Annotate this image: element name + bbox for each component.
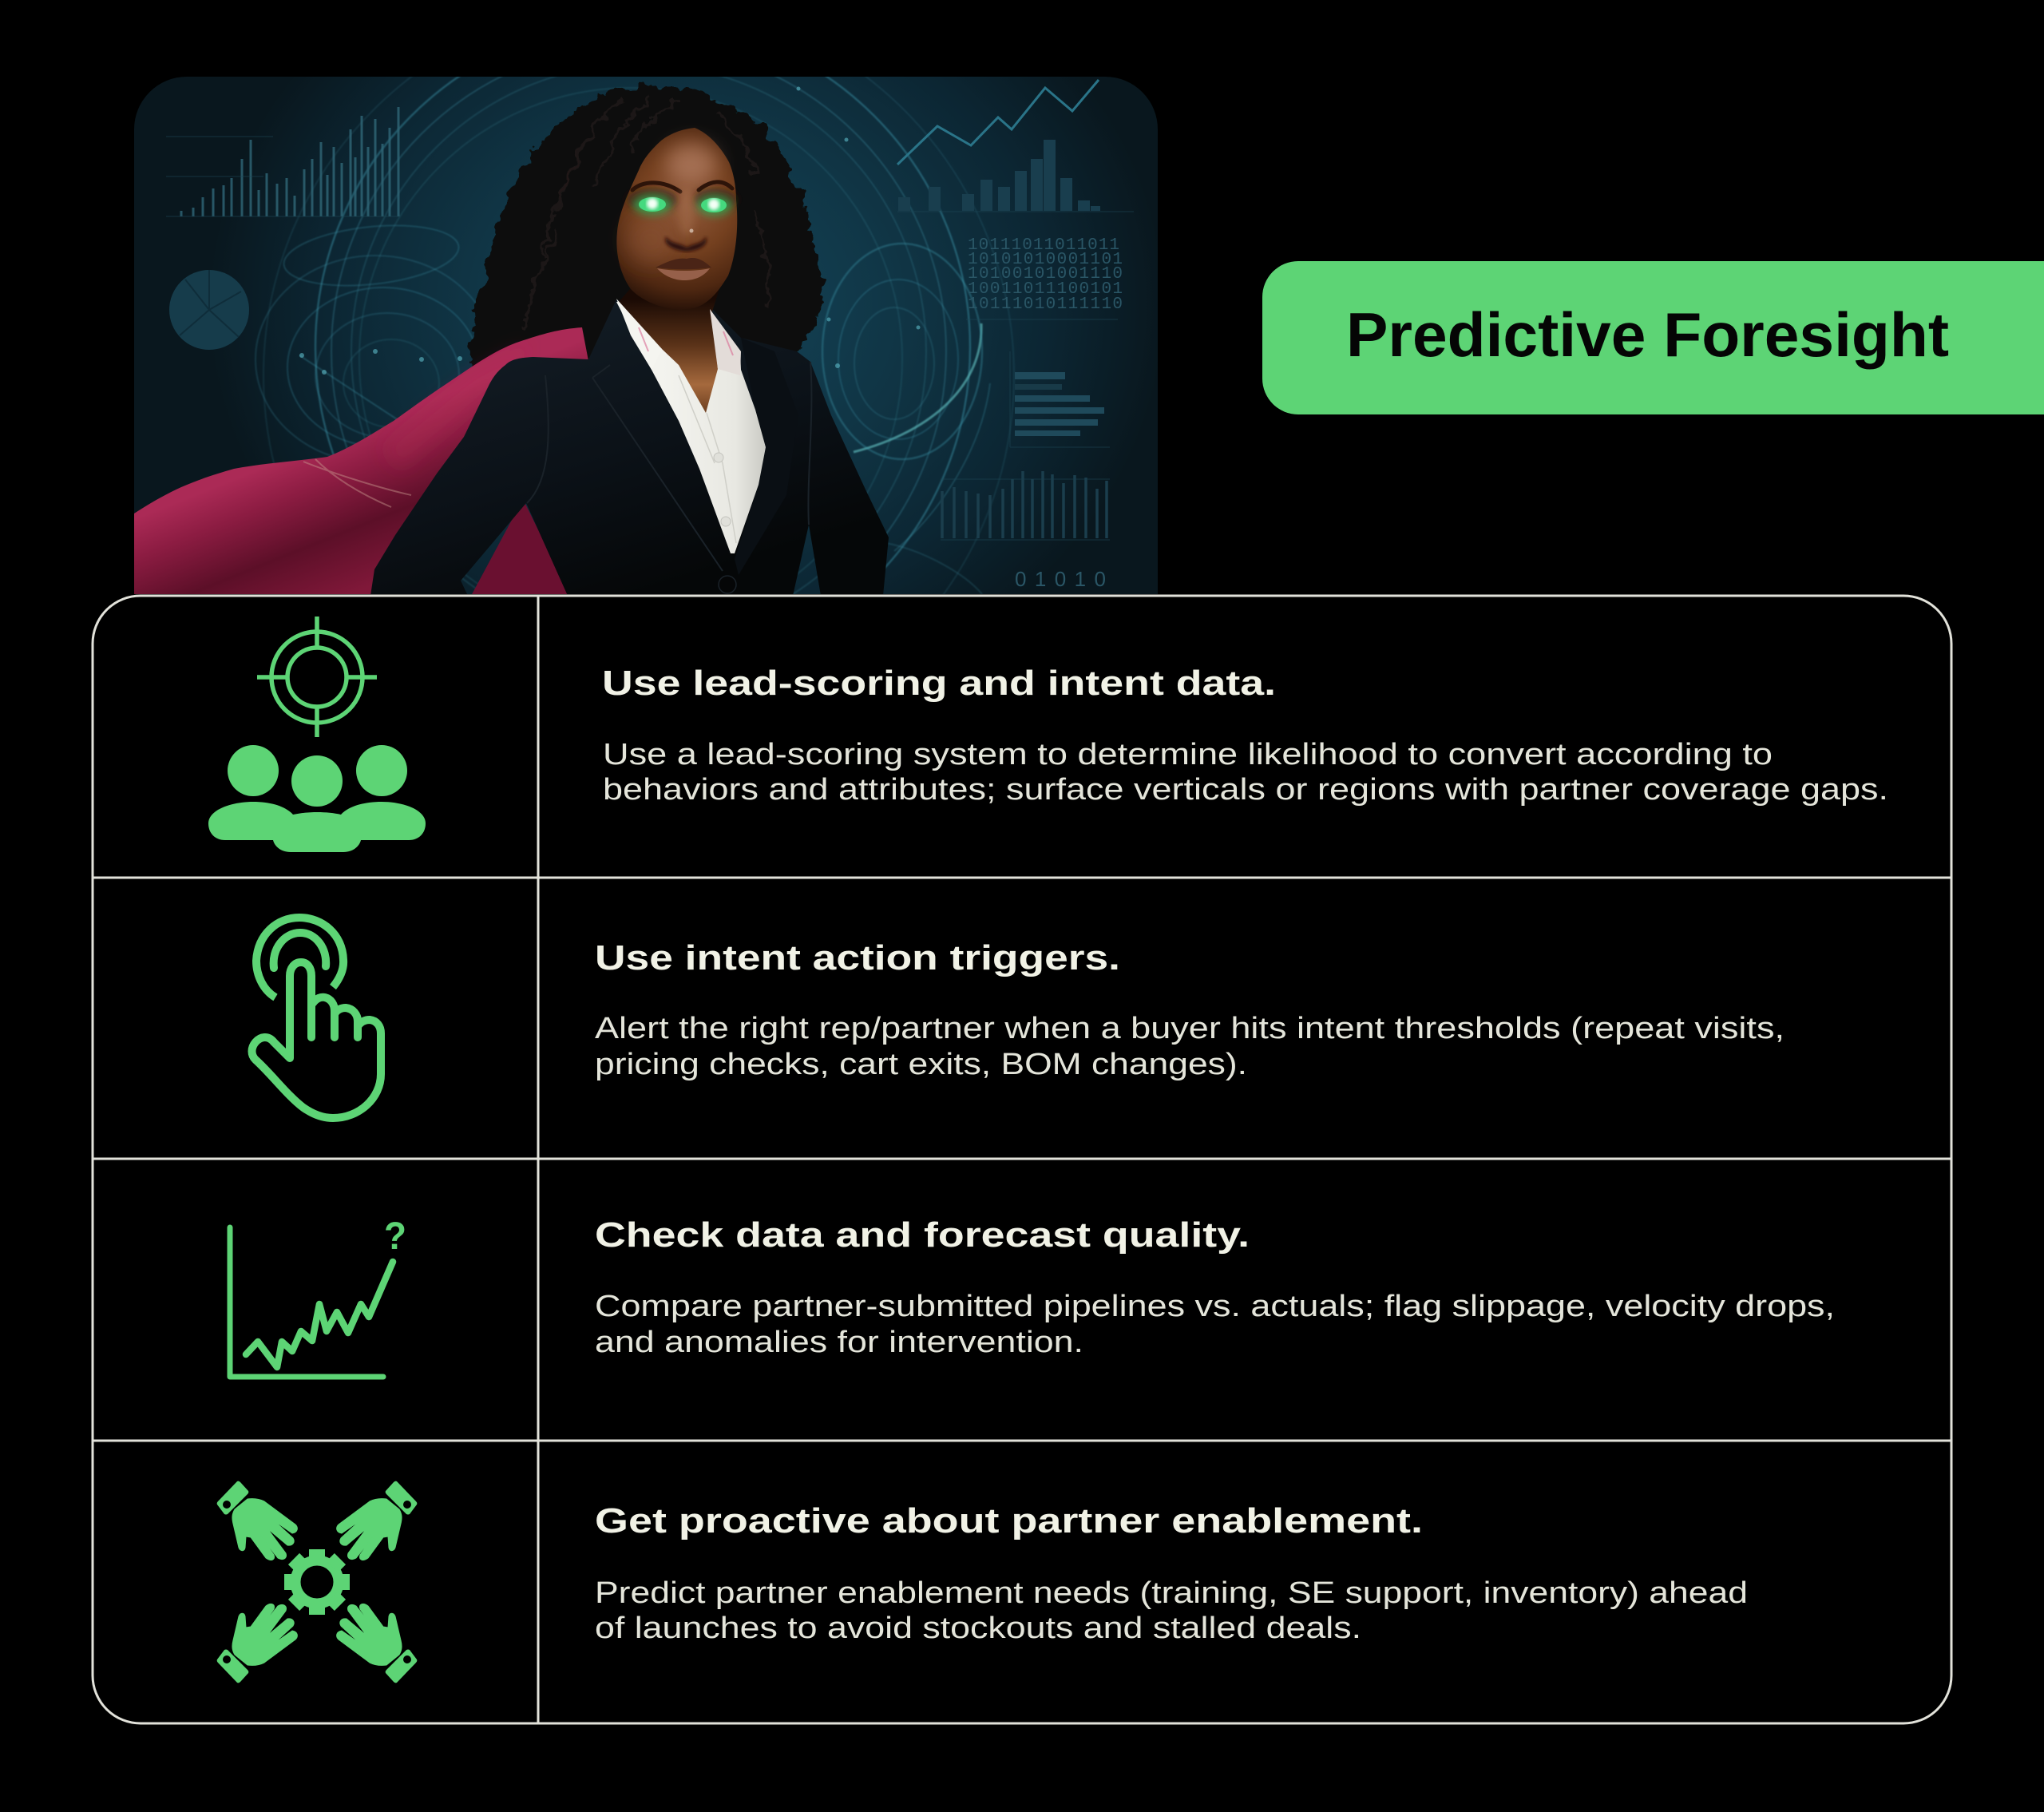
cheek light bbox=[627, 216, 675, 264]
row 4 text bbox=[595, 1501, 1748, 1645]
cape creases bbox=[303, 459, 411, 507]
data wall: top-right bar chart bbox=[898, 140, 1100, 211]
row 3 text: Check data and forecast quality. bbox=[595, 1215, 1250, 1255]
data wall: horizontal bars bbox=[1015, 372, 1104, 436]
row 4 text: Predict partner enablement needs (training, SE support, inventory) ahead bbox=[595, 1576, 1748, 1610]
right lapel bbox=[735, 338, 798, 575]
icon: target above three people bbox=[208, 617, 426, 852]
title: Predictive Foresight bbox=[1346, 299, 1949, 370]
icon: rising line chart with question mark: ? bbox=[384, 1215, 406, 1258]
data wall: binary text: 10100101001110 bbox=[968, 265, 1123, 283]
row 3 text: and anomalies for intervention. bbox=[595, 1326, 1083, 1359]
data wall: top-left bar chart bbox=[181, 107, 398, 216]
data wall: stars bbox=[299, 86, 920, 375]
data wall: faint grid bbox=[166, 137, 1134, 540]
data wall: top-right line chart bbox=[897, 80, 1099, 165]
row 2 text: pricing checks, cart exits, BOM changes). bbox=[595, 1048, 1247, 1081]
data wall: binary text: 10101010001101 bbox=[968, 251, 1123, 269]
row 1 text: Use a lead-scoring system to determine likelihood to convert according to bbox=[603, 738, 1773, 771]
row 1 text bbox=[602, 664, 1888, 807]
row 3 text: Compare partner-submitted pipelines vs. actuals; flag slippage, velocity drops, bbox=[595, 1290, 1835, 1323]
icon: hand tapping with rings bbox=[252, 918, 381, 1118]
face bbox=[616, 128, 737, 309]
data wall: binary text bbox=[969, 238, 1122, 308]
shirt bbox=[616, 272, 766, 553]
eyes glowing bbox=[633, 194, 732, 216]
icon: rising line chart with question mark bbox=[230, 1215, 406, 1377]
icon: four hands around a gear bbox=[217, 1481, 417, 1683]
data wall: binary text: 10111010111110 bbox=[968, 295, 1123, 314]
data wall: binary text: 10011011100101 bbox=[968, 280, 1123, 299]
row 1 text: Use lead-scoring and intent data. bbox=[602, 664, 1276, 703]
table frame bbox=[93, 596, 1951, 1723]
sleeve seam bbox=[527, 362, 811, 571]
mouth bbox=[656, 258, 711, 269]
cape bbox=[134, 327, 588, 596]
hair bbox=[470, 86, 822, 383]
row 4 text: Get proactive about partner enablement. bbox=[595, 1501, 1423, 1540]
cape behind arm bbox=[471, 499, 571, 596]
jacket bbox=[370, 299, 889, 596]
title banner bbox=[1262, 261, 2044, 414]
shirt placket and buttons bbox=[679, 375, 736, 543]
forehead highlight bbox=[666, 143, 717, 184]
row 4 text: of launches to avoid stockouts and stalled deals. bbox=[595, 1612, 1361, 1645]
nose bbox=[679, 188, 695, 236]
row 2 text bbox=[595, 938, 1785, 1081]
jacket button bbox=[719, 576, 736, 593]
hair highlights bbox=[523, 97, 768, 327]
eye sockets bbox=[627, 188, 678, 211]
row 3 text bbox=[595, 1215, 1835, 1359]
photo: superhero businesswoman with glowing eyes in front of data wall bbox=[134, 77, 1158, 594]
data wall: pie chart bbox=[169, 270, 249, 350]
data wall: binary text: 10111011011011 bbox=[968, 236, 1119, 255]
eyebrows bbox=[632, 183, 680, 192]
row 2 text: Use intent action triggers. bbox=[595, 938, 1120, 977]
row 2 text: Alert the right rep/partner when a buyer hits intent thresholds (repeat visits, bbox=[595, 1012, 1785, 1045]
data wall: bottom binary: 01010 bbox=[1015, 567, 1106, 591]
data wall: concentric arcs bbox=[254, 77, 1015, 594]
collar flaps bbox=[616, 299, 662, 370]
cape ridge highlight bbox=[383, 343, 527, 471]
neck bbox=[619, 272, 725, 413]
row 1 text: behaviors and attributes; surface verticals or regions with partner coverage gaps. bbox=[603, 773, 1888, 807]
data wall: lower right bars bbox=[942, 471, 1107, 538]
